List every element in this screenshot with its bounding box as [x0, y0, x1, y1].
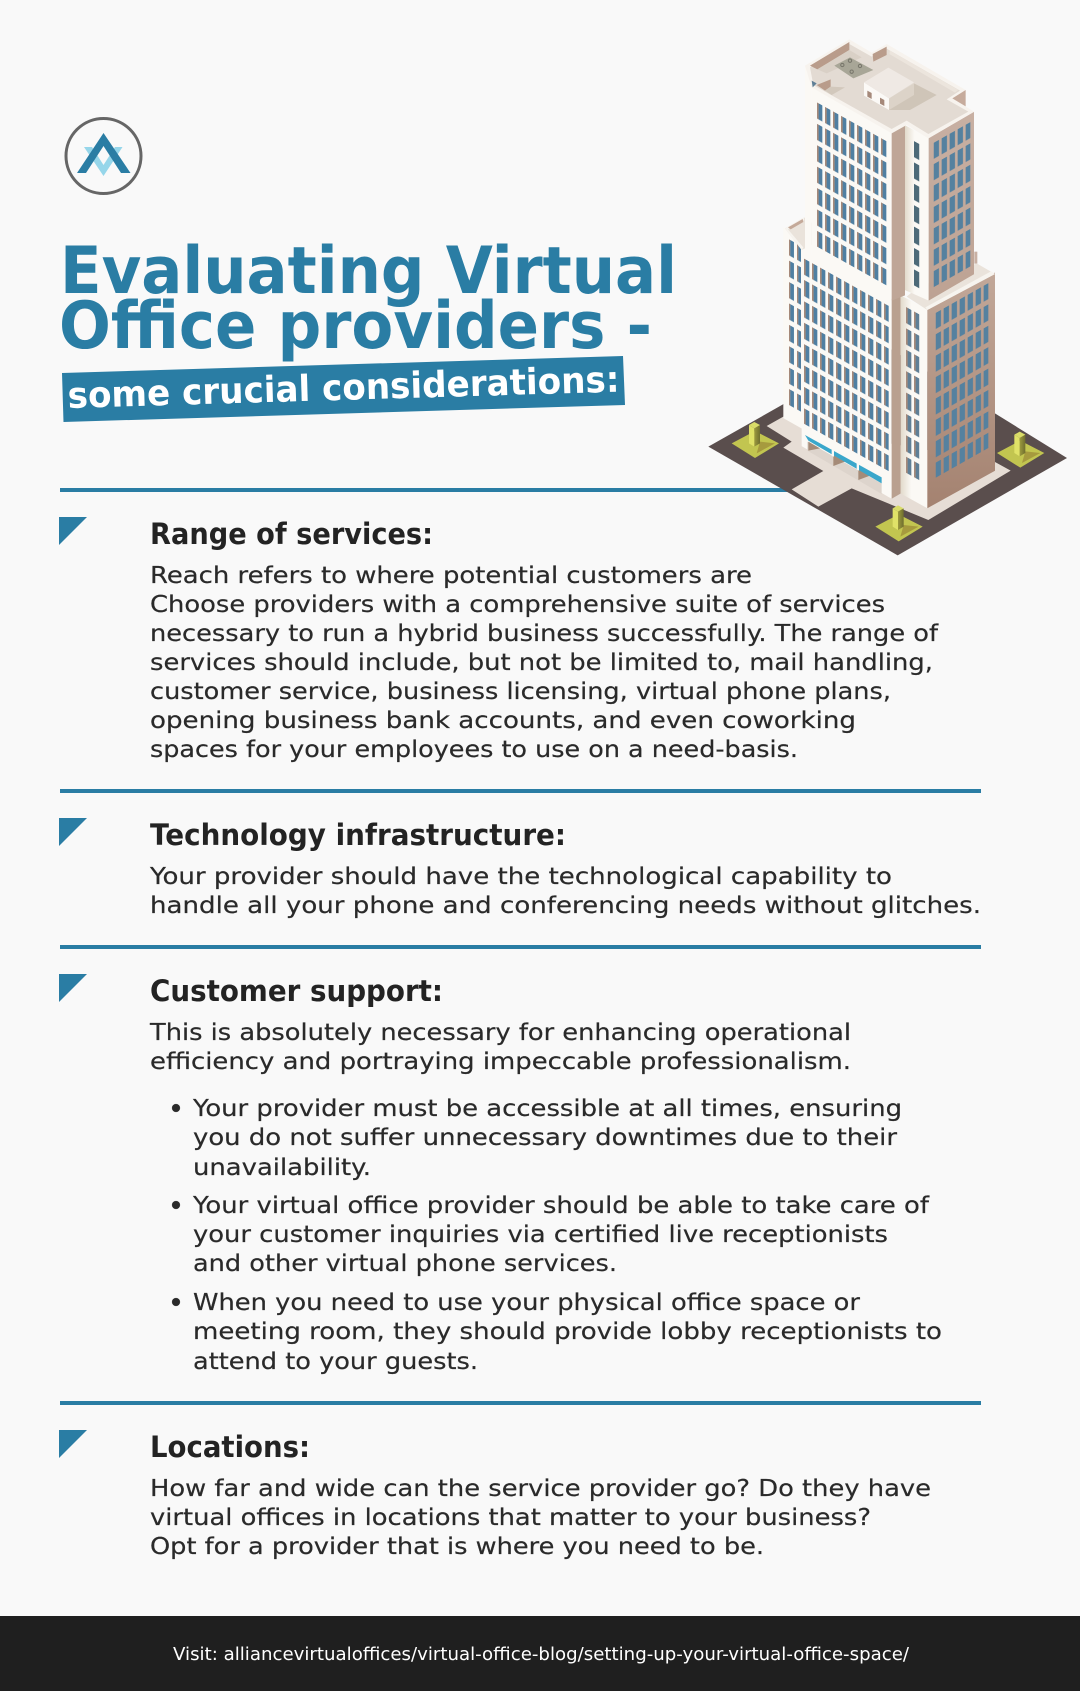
marker triangle: [59, 974, 87, 1002]
bullet three: attend to your guests.: [193, 1347, 478, 1375]
tree front: [875, 505, 923, 541]
section: customer support: [59, 974, 942, 1375]
marker triangle: [59, 818, 87, 846]
title: [59, 234, 677, 364]
body text: [150, 561, 939, 763]
heading: Locations:: [150, 1430, 310, 1464]
body text: customer service, business licensing, virtual phone plans,: [150, 677, 891, 705]
footer: [0, 1616, 1080, 1691]
tree left: [732, 422, 779, 458]
footer: Visit: alliancevirtualoffices/virtual-office-blog/setting-up-your-virtual-office-space/: [173, 1645, 909, 1665]
body text: Opt for a provider that is where you need to be.: [150, 1532, 764, 1560]
bullet two: [172, 1191, 930, 1277]
roof ledges of the lower tower: [785, 217, 995, 310]
heading: Customer support:: [150, 974, 443, 1008]
bullet two: Your virtual office provider should be able to take care of: [192, 1191, 930, 1219]
marker triangle: [59, 517, 87, 545]
divider: header rule: [60, 488, 790, 492]
body text: This is absolutely necessary for enhancing operational: [149, 1018, 851, 1046]
heading: Technology infrastructure:: [150, 818, 566, 852]
body text: virtual offices in locations that matter to your business?: [150, 1503, 871, 1531]
bullet one: you do not suffer unnecessary downtimes due to their: [193, 1123, 897, 1151]
logo: [66, 118, 141, 194]
body text: spaces for your employees to use on a need-basis.: [150, 735, 798, 763]
bullet two: and other virtual phone services.: [193, 1249, 617, 1277]
body text: [149, 1018, 851, 1075]
divider 1: [60, 789, 981, 793]
entrance canopy: [805, 435, 882, 494]
section: technology infrastructure: [59, 818, 981, 919]
AC units: [834, 57, 873, 78]
title: Evaluating Virtual: [60, 234, 677, 309]
bullet one: Your provider must be accessible at all times, ensuring: [192, 1094, 902, 1122]
illustration: isometric office building: [708, 39, 1067, 555]
divider 3: [60, 1401, 981, 1405]
body text: How far and wide can the service provider go? Do they have: [150, 1474, 931, 1502]
bullet three: meeting room, they should provide lobby receptionists to: [193, 1317, 942, 1345]
penthouse box: [864, 68, 937, 110]
tree right: [997, 432, 1044, 468]
bullet one: unavailability.: [193, 1153, 371, 1181]
body text: [150, 1474, 931, 1560]
section: locations: [59, 1430, 931, 1560]
body text: opening business bank accounts, and even coworking: [150, 706, 856, 734]
upper tower: [805, 66, 974, 301]
bullet three: When you need to use your physical office space or: [193, 1288, 860, 1316]
bullet one: [172, 1094, 902, 1181]
marker triangle: [59, 1430, 87, 1458]
trees: [732, 422, 1044, 541]
body text: Choose providers with a comprehensive suite of services: [150, 590, 885, 618]
body text: efficiency and portraying impeccable professionalism.: [150, 1047, 851, 1075]
body text: services should include, but not be limited to, mail handling,: [150, 648, 933, 676]
bullet two: your customer inquiries via certified live receptionists: [193, 1220, 888, 1248]
bullet three: [172, 1288, 942, 1375]
lower tower: [783, 227, 995, 508]
subtitle banner: some crucial considerations:: [67, 360, 620, 417]
body text: Reach refers to where potential customers are: [150, 561, 752, 589]
divider 2: [60, 945, 981, 949]
roof: [805, 39, 974, 138]
body text: handle all your phone and conferencing needs without glitches.: [150, 891, 981, 919]
body text: Your provider should have the technological capability to: [149, 862, 892, 890]
ground plot and pavement: [708, 346, 1067, 555]
body text: necessary to run a hybrid business successfully. The range of: [150, 619, 939, 647]
title: Office providers -: [59, 289, 652, 364]
body text: [149, 862, 981, 919]
section: range of services: [59, 517, 939, 763]
heading: Range of services:: [150, 517, 433, 551]
